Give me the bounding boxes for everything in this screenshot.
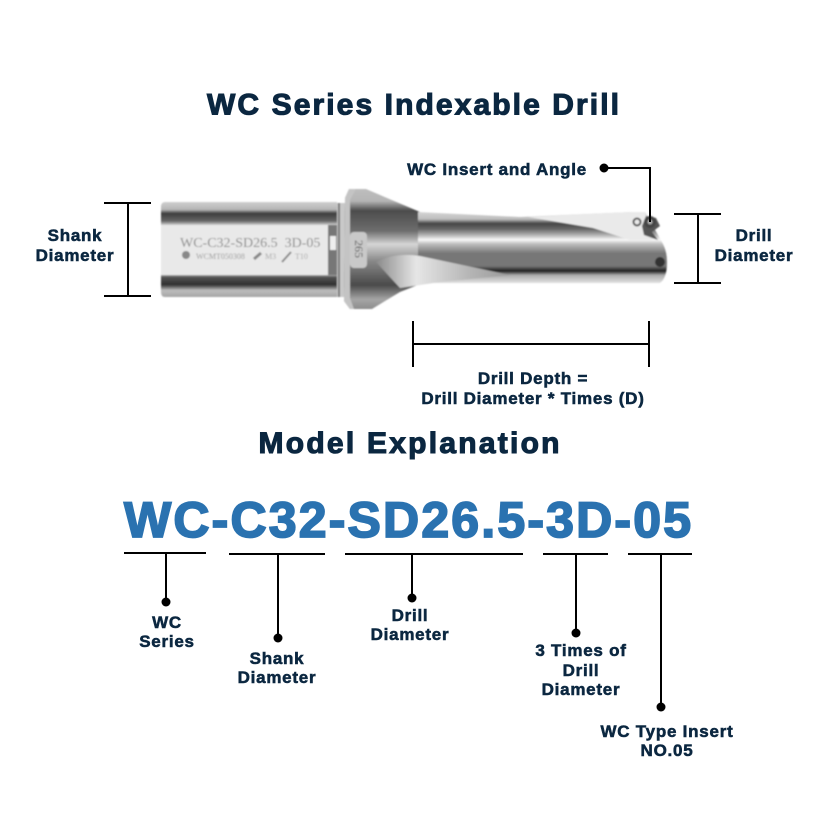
shank flat with engraving: WCMT050308 — [196, 252, 245, 261]
coolant hole — [655, 257, 665, 267]
drill body — [418, 212, 667, 283]
drill photo — [161, 189, 667, 309]
segment: times of drill diameter — [535, 554, 627, 699]
segment: WC series: WC — [152, 613, 182, 632]
shank — [161, 202, 337, 297]
flange and cone — [344, 189, 420, 309]
heading: model explanation: Model Explanation — [258, 427, 560, 460]
segment: shank diameter: Shank — [250, 649, 304, 668]
flange marking: 265 — [352, 240, 366, 258]
segment: shank diameter — [229, 554, 325, 687]
segment: insert number: NO.05 — [641, 741, 693, 760]
shank diameter bracket — [104, 203, 151, 296]
segment: times of drill diameter: Drill — [563, 661, 599, 680]
segment: drill diameter: Drill — [392, 606, 428, 625]
segment: insert number — [601, 554, 733, 760]
segment: WC series — [124, 553, 206, 651]
flange marking — [350, 232, 367, 268]
drill depth label — [421, 369, 645, 408]
shank flat with engraving: T10 — [295, 252, 308, 261]
segment: drill diameter — [345, 554, 523, 644]
insert label: WC Insert and Angle — [407, 160, 587, 179]
shank diameter label: Shank — [48, 226, 102, 245]
segment: drill diameter: Diameter — [371, 625, 449, 644]
segment: shank diameter: Diameter — [238, 668, 316, 687]
drill diameter bracket — [674, 214, 721, 283]
segment: WC series: Series — [139, 632, 195, 651]
shank diameter label: Diameter — [36, 246, 114, 265]
segment: insert number: WC Type Insert — [601, 722, 733, 741]
segment: times of drill diameter: Diameter — [542, 680, 620, 699]
drill depth label: Drill Depth = — [478, 369, 588, 388]
insert callout line — [600, 164, 650, 222]
drill depth bracket — [413, 321, 649, 367]
drill diameter label: Diameter — [715, 246, 793, 265]
flute highlights — [376, 255, 510, 288]
drill diameter label: Drill — [736, 226, 772, 245]
drill depth label: Drill Diameter * Times (D) — [421, 389, 645, 408]
drill diameter label — [715, 226, 793, 265]
segment: times of drill diameter: 3 Times of — [535, 641, 627, 660]
shank flat with engraving — [161, 225, 328, 275]
title: WC Series Indexable Drill — [207, 88, 619, 122]
shank flat with engraving: WC-C32-SD26.5 3D-05 — [180, 236, 320, 251]
model code: WC-C32-SD26.5-3D-05 — [124, 492, 691, 548]
insert and screw — [634, 216, 660, 240]
collar — [337, 203, 345, 297]
shank diameter label — [36, 226, 114, 265]
shank flat with engraving: M3 — [265, 252, 276, 261]
